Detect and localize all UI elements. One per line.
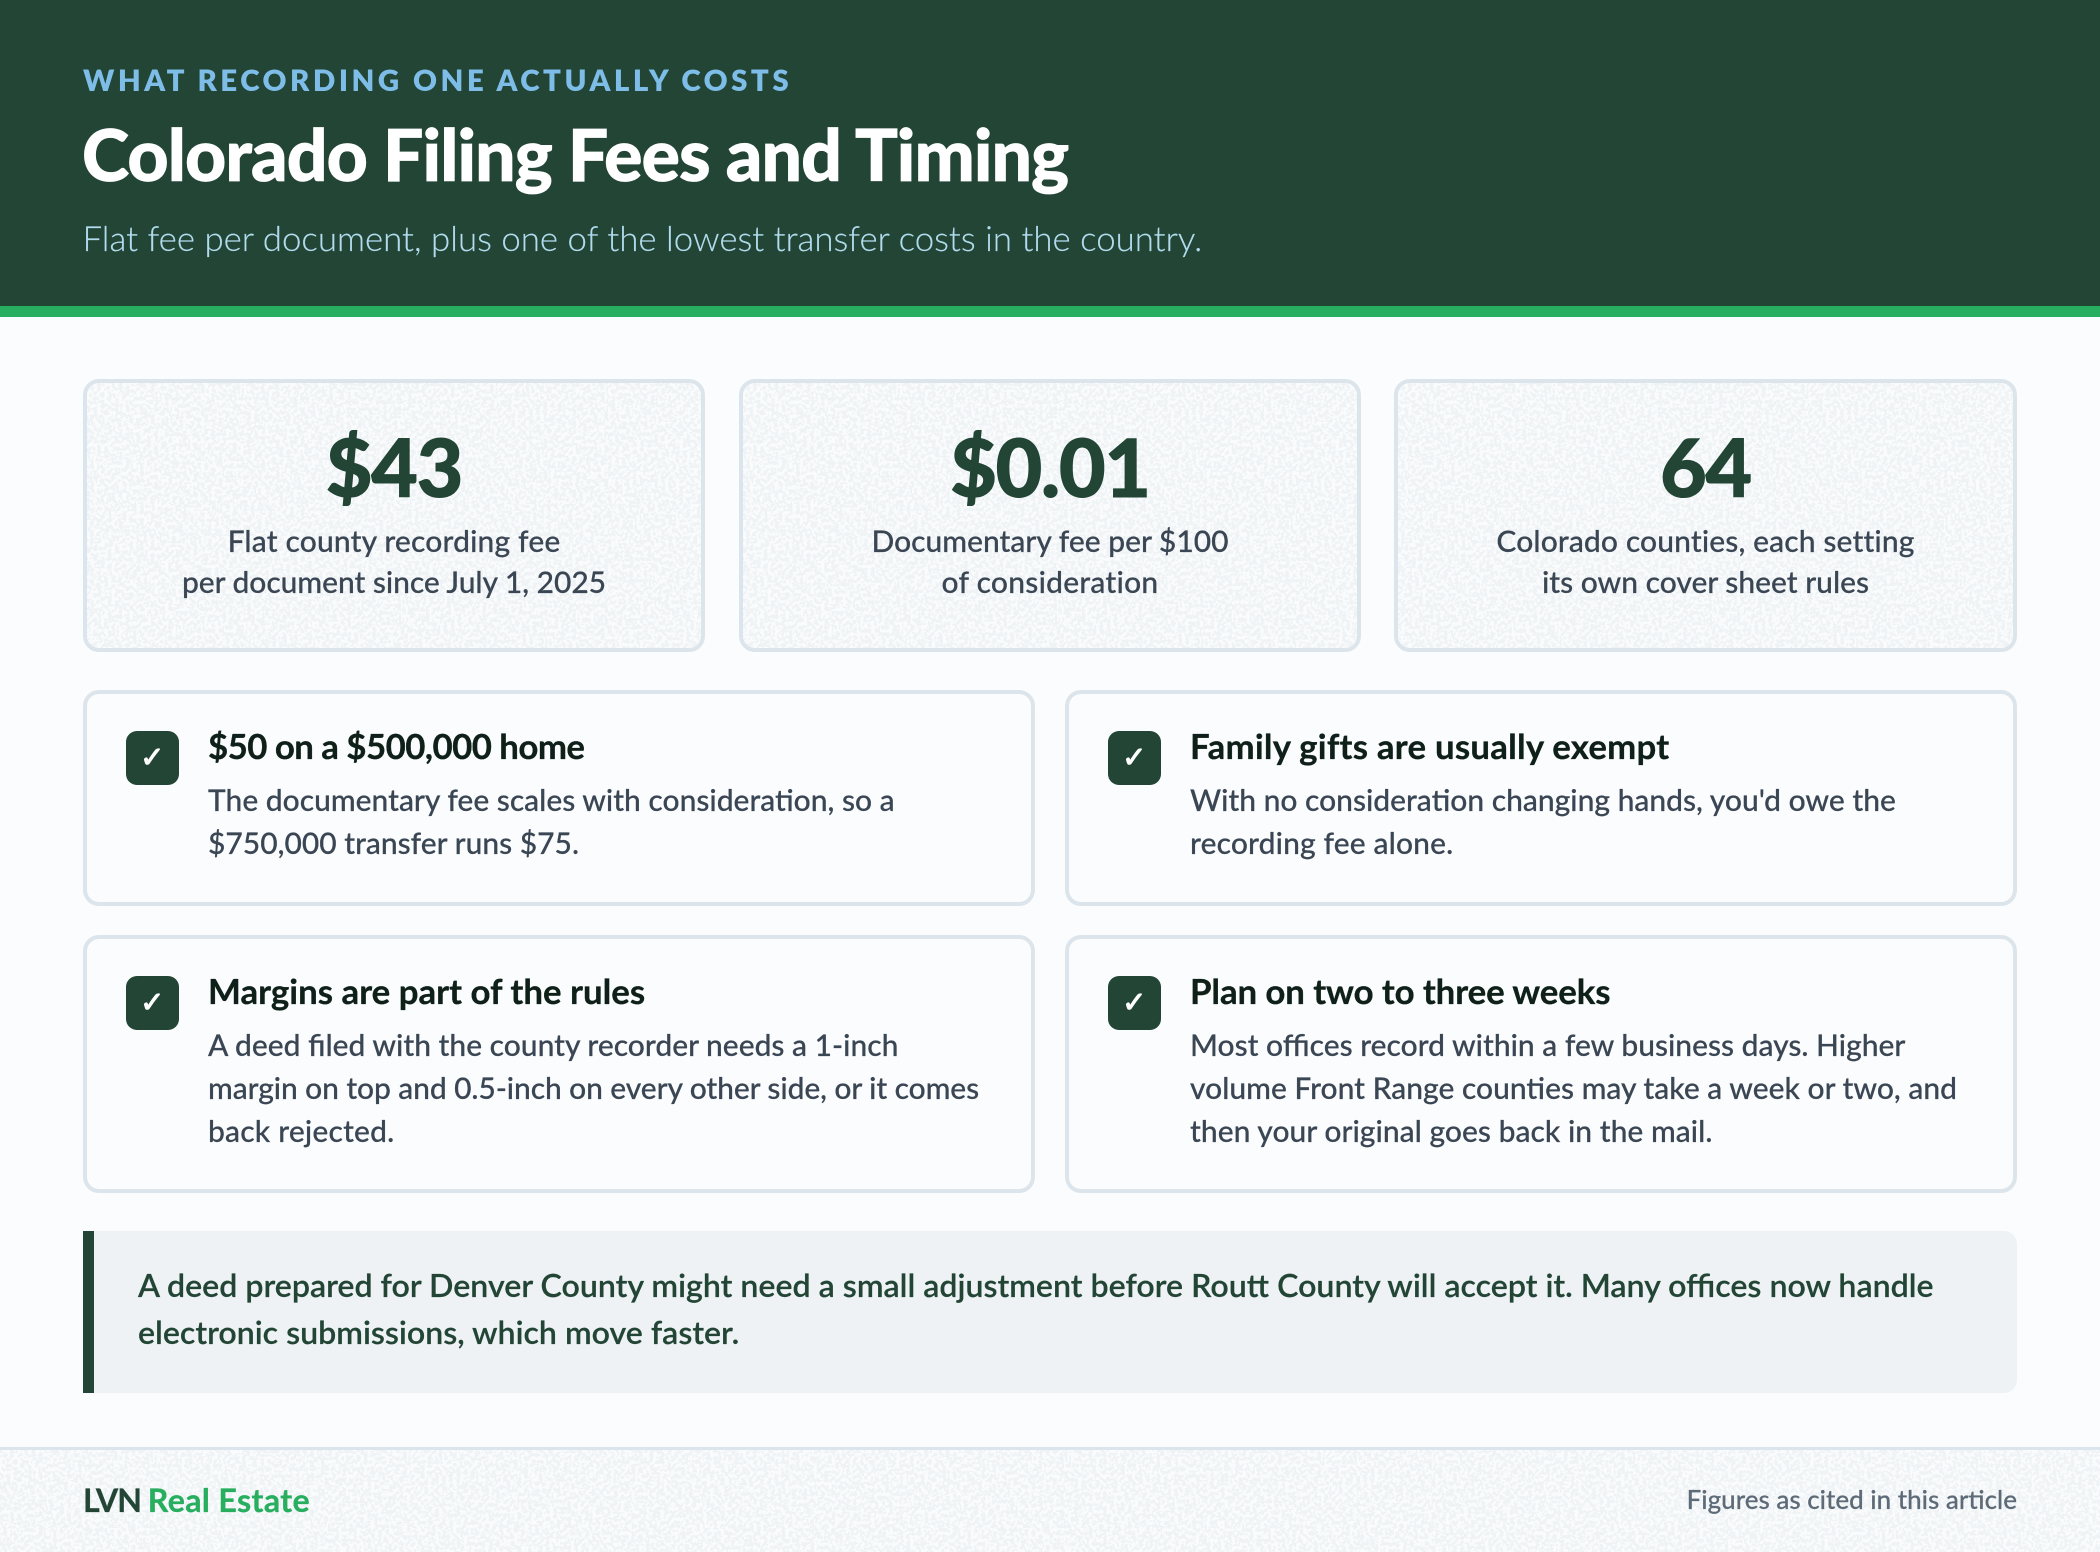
- footer: [0, 1447, 2100, 1552]
- card body: back rejected.: [208, 1113, 394, 1149]
- icon: check: [1108, 976, 1161, 1030]
- card body: Most offices record within a few business days. Higher: [1190, 1027, 1905, 1063]
- callout: [83, 1231, 2017, 1393]
- stat label: [871, 523, 1229, 600]
- card body: $750,000 transfer runs $75.: [208, 825, 579, 861]
- card body: margin on top and 0.5-inch on every other side, or it comes: [208, 1070, 979, 1106]
- card body: The documentary fee scales with consideration, so a: [208, 782, 895, 818]
- header banner: [0, 0, 2100, 317]
- icon: check: [1108, 731, 1161, 784]
- callout: A deed prepared for Denver County might need a small adjustment before Routt County will accept it. Many offices now handle: [138, 1264, 1934, 1304]
- stat label: Documentary fee per $100: [871, 523, 1229, 559]
- eyebrow: WHAT RECORDING ONE ACTUALLY COSTS: [83, 63, 792, 98]
- card body: volume Front Range counties may take a week or two, and: [1190, 1070, 1957, 1106]
- card heading: $50 on a $500,000 home: [208, 726, 584, 767]
- stat label: of consideration: [942, 564, 1158, 600]
- stat label: its own cover sheet rules: [1542, 564, 1869, 600]
- card body: [1190, 782, 1896, 861]
- card body: [208, 782, 895, 861]
- stat card: documentary fee: [739, 379, 1361, 652]
- card heading: Family gifts are usually exempt: [1190, 726, 1669, 767]
- stat label: per document since July 1, 2025: [182, 564, 606, 600]
- stat card: counties: [1394, 379, 2017, 652]
- stat card: recording fee: [83, 379, 705, 652]
- card heading: Margins are part of the rules: [208, 971, 645, 1012]
- callout: electronic submissions, which move faster.: [138, 1312, 739, 1350]
- subtitle: Flat fee per document, plus one of the lowest transfer costs in the country.: [82, 218, 1202, 258]
- icon: check: [126, 976, 179, 1030]
- card body: then your original goes back in the mail.: [1190, 1113, 1712, 1149]
- stat number: $0.01: [950, 419, 1150, 515]
- icon: check: ✓: [140, 740, 164, 774]
- stat number: 64: [1660, 419, 1751, 515]
- icon: check: ✓: [1122, 740, 1146, 774]
- brand: LVN Real Estate: [83, 1480, 310, 1518]
- card heading: Plan on two to three weeks: [1190, 971, 1610, 1012]
- stat label: [182, 523, 606, 600]
- stat label: Flat county recording fee: [228, 523, 560, 559]
- stat number: $43: [326, 419, 462, 515]
- panel: Plan on two to three weeks: [1065, 935, 2017, 1193]
- stat label: Colorado counties, each setting: [1496, 523, 1915, 559]
- card body: recording fee alone.: [1190, 825, 1453, 861]
- panel: $50 on a $500,000 home: [83, 690, 1035, 906]
- panel: Family gifts are usually exempt: [1065, 690, 2017, 906]
- card body: [1190, 1027, 1957, 1149]
- icon: check: ✓: [140, 985, 164, 1019]
- icon: check: ✓: [1122, 985, 1146, 1019]
- card body: A deed filed with the county recorder needs a 1-inch: [208, 1027, 898, 1063]
- icon: check: [126, 731, 179, 784]
- card body: [208, 1027, 979, 1149]
- stat label: [1496, 523, 1915, 600]
- title: Colorado Filing Fees and Timing: [82, 111, 1068, 197]
- source note: Figures as cited in this article: [1687, 1483, 2017, 1515]
- panel: Margins are part of the rules: [83, 935, 1035, 1193]
- card body: With no consideration changing hands, you'd owe the: [1190, 782, 1896, 818]
